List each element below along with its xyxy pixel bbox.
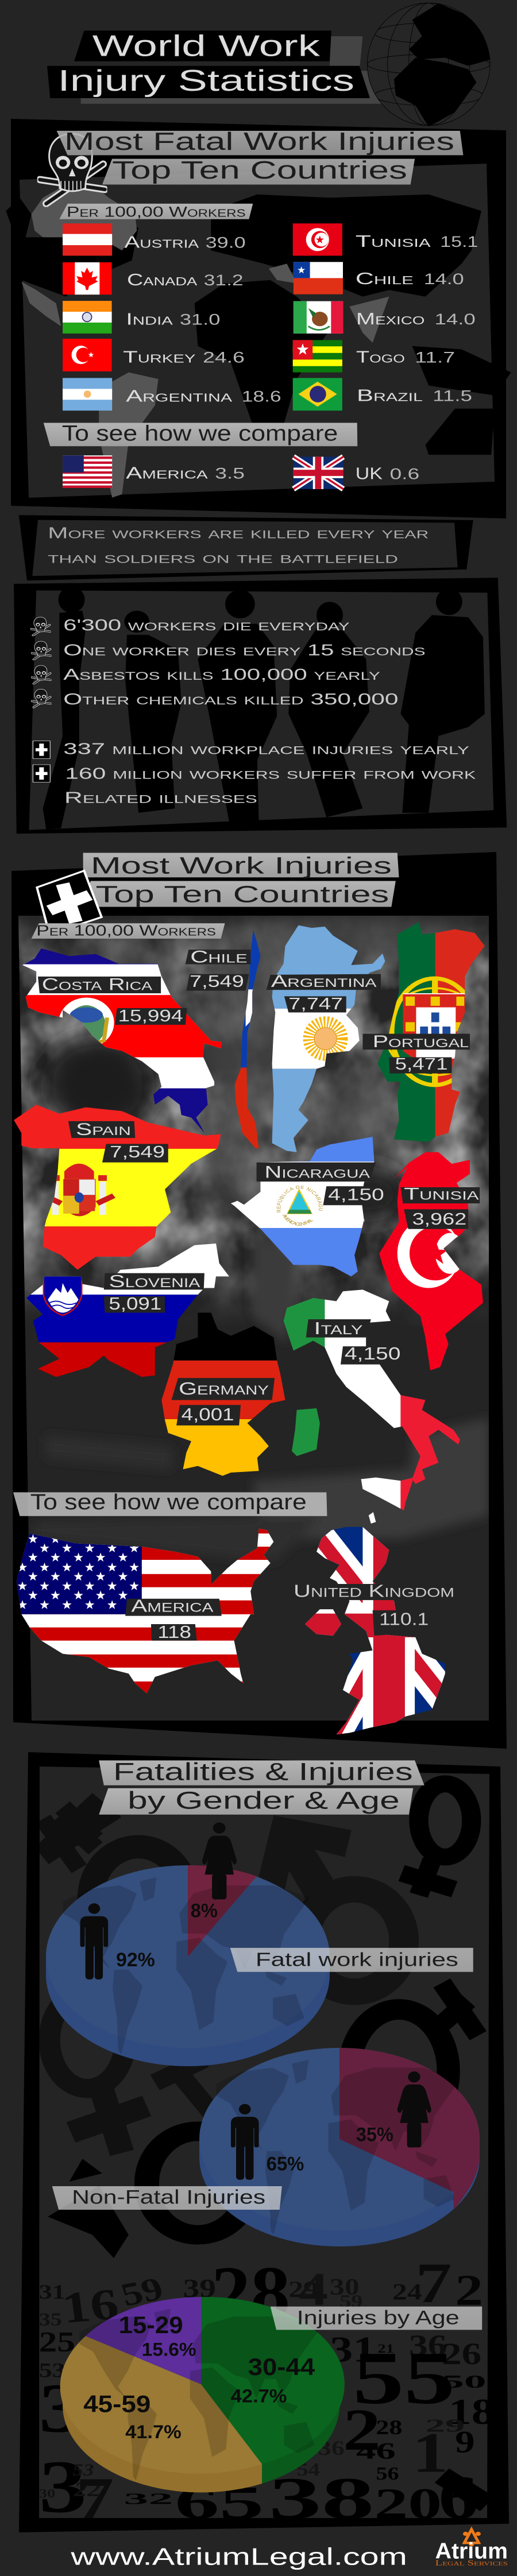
- numbers backdrop: 4: [298, 2264, 328, 2315]
- injury statistics: [63, 740, 476, 807]
- numbers backdrop: 35: [39, 2310, 62, 2330]
- panel: most work injuries: [11, 852, 507, 1749]
- heading line 2: [102, 157, 415, 184]
- numbers backdrop: 59: [339, 2291, 362, 2311]
- map: Argentina: [271, 924, 389, 1153]
- label: 92 percent: 92%: [116, 1949, 155, 1971]
- map: Nicaragua: AMERICA CENTRAL: [282, 1215, 314, 1226]
- heading line 2: by Gender & Age: [128, 1787, 400, 1814]
- country values: right column: Brazil: [357, 387, 423, 405]
- panel: soldiers callout and statistics: [14, 515, 507, 834]
- map: Costa Rica: [20, 946, 224, 1134]
- map: Tunisia: [376, 1149, 488, 1374]
- numbers backdrop: 31: [330, 2330, 376, 2370]
- subheading: per 100,00 workers: [59, 204, 253, 220]
- age labels: 15.6%: [142, 2339, 196, 2360]
- country values: left column: 39.0: [206, 234, 246, 251]
- labels: lower countries: Italy: [314, 1318, 363, 1338]
- numbers backdrop: 29: [425, 2415, 465, 2435]
- country values: right column: Mexico: [356, 310, 425, 328]
- country values: left column: India: [126, 310, 173, 328]
- numbers backdrop: 31: [39, 2280, 65, 2303]
- numbers backdrop: 50: [442, 2372, 487, 2392]
- label: 8 percent: 8%: [191, 1899, 218, 1922]
- numbers backdrop: 38: [269, 2465, 374, 2531]
- age labels: 45-59: [83, 2391, 151, 2418]
- numbers backdrop: 22: [74, 2478, 101, 2501]
- labels: upper countries: 4,150: [328, 1185, 384, 1203]
- labels: upper countries: Costa Rica: [42, 975, 152, 994]
- labels: upper countries: 7,549: [110, 1142, 165, 1161]
- labels: upper countries: Spain: [76, 1120, 131, 1139]
- subheading: per 100,00 workers: Per 100,00 Workers: [67, 204, 246, 220]
- icon: plus: [37, 871, 102, 934]
- heading line 1: Most Fatal Work Injuries: [64, 128, 454, 156]
- numbers backdrop: 55: [353, 2337, 455, 2420]
- banner: non-fatal injuries: Non-Fatal Injuries: [72, 2186, 265, 2208]
- numbers backdrop: 2: [343, 2396, 381, 2463]
- panel frame: [19, 1752, 509, 2532]
- panel: gender and age: [19, 1752, 509, 2532]
- x-ray backdrop: [18, 916, 489, 1562]
- labels: upper countries: 7,549: [190, 972, 244, 990]
- numbers backdrop: 9: [455, 2425, 475, 2459]
- label: Tunisia: [400, 1184, 480, 1229]
- comparison heading: To see how we compare: [62, 421, 338, 446]
- numbers backdrop: 30: [330, 2274, 360, 2300]
- labels: upper countries: Portugal: [373, 1032, 469, 1051]
- numbers backdrop: 2: [455, 2265, 483, 2314]
- flag: Togo: [293, 340, 342, 373]
- map: Spain: [10, 1102, 227, 1273]
- country values: left column: [123, 234, 281, 482]
- label: Tunisia: Tunisia: [404, 1184, 479, 1203]
- silhouettes of workers: [43, 587, 485, 829]
- age labels: 30-44: [248, 2354, 315, 2381]
- title line 2: [47, 64, 370, 98]
- labels: lower countries: [104, 1271, 455, 1642]
- panel: most fatal work injuries: [6, 119, 511, 518]
- numbers backdrop: 16: [59, 2279, 121, 2333]
- country values: left column: America: [126, 464, 209, 482]
- flag: America: [63, 455, 112, 488]
- country values: left column: Canada: [127, 271, 198, 289]
- map: Italy: [280, 1288, 463, 1516]
- labels: upper countries: Nicaragua: [264, 1163, 370, 1182]
- labels: upper countries: 7,747: [288, 994, 343, 1013]
- numbers backdrop: 46: [356, 2439, 396, 2464]
- country values: right column: 0.6: [389, 466, 419, 483]
- chart: fatal work injuries pie: [46, 1865, 330, 2066]
- flag: Brazil: [293, 378, 342, 410]
- subheading: per 100,00 workers: Per 100,00 Workers: [36, 923, 216, 939]
- flag: Chile: [294, 262, 343, 295]
- icon: man non-fatal: [231, 2104, 259, 2180]
- map: Portugal: [376, 920, 488, 1143]
- age labels: 42.7%: [231, 2385, 287, 2406]
- map: United Kingdom: [303, 1512, 452, 1740]
- heading line 2: Top Ten Countries: [95, 881, 389, 908]
- numbers backdrop: 20: [374, 2479, 442, 2528]
- labels: upper countries: 15,994: [118, 1006, 183, 1025]
- icon: woman non-fatal: [398, 2071, 431, 2148]
- numbers backdrop: 39: [183, 2275, 216, 2303]
- country values: right column: Tunisia: [356, 233, 431, 251]
- labels: upper countries: Argentina: [271, 972, 377, 991]
- icon: skull and crossbones: [40, 134, 105, 204]
- labels: lower countries: 110.1: [379, 1609, 429, 1629]
- title line 2: Injury Statistics: [57, 64, 354, 97]
- icons: skulls: [31, 617, 51, 707]
- injury statistics: 160 million workers suffer from work: [65, 765, 476, 783]
- label: 65 percent: 65%: [267, 2153, 304, 2175]
- title line 1: [74, 29, 331, 63]
- website address: www.AtriumLegal.com: [70, 2544, 407, 2570]
- icon: Atrium logo mark: [463, 2529, 481, 2546]
- country values: left column: 3.5: [215, 464, 245, 482]
- deaths statistics: [63, 617, 425, 708]
- title line 1: World Work: [92, 29, 320, 63]
- heading line 2: Top Ten Countries: [112, 157, 407, 184]
- numbers backdrop: 53: [39, 2358, 65, 2382]
- age labels: [83, 2312, 315, 2442]
- country values: left column: 31.0: [180, 311, 220, 328]
- map: America: [13, 1527, 277, 1696]
- numbers backdrop: 24: [392, 2280, 422, 2305]
- numbers backdrop: 28: [211, 2252, 290, 2334]
- numbers backdrop: 54: [297, 2459, 320, 2480]
- deaths statistics: Asbestos kills 100,000 yearly: [63, 666, 380, 684]
- numbers backdrop: 3: [39, 2446, 87, 2528]
- banner: fatal work injuries: Fatal work injuries: [256, 1949, 458, 1970]
- labels: upper countries: Chile: [190, 947, 248, 966]
- flag: Turkey: [63, 339, 112, 371]
- country values: right column: Togo: [356, 348, 405, 366]
- injury statistics: 337 million workplace injuries yearly: [63, 740, 469, 758]
- labels: upper countries: [38, 947, 470, 1205]
- title block: [47, 3, 491, 127]
- flag: Austria: [63, 223, 112, 255]
- chart: non-fatal injuries pie: [199, 2048, 480, 2246]
- map: Slovenia: [23, 1242, 234, 1378]
- country values: right column: 14.0: [424, 270, 464, 288]
- callout: workers vs soldiers: [19, 515, 473, 580]
- labels: lower countries: 4,001: [182, 1404, 234, 1424]
- heading line 1: Most Work Injuries: [91, 853, 392, 879]
- country values: right column: 11.5: [433, 388, 472, 405]
- flag: India: [63, 301, 112, 334]
- country values: left column: Austria: [124, 234, 199, 252]
- country values: right column: [356, 233, 478, 483]
- numbers backdrop: 3: [39, 2370, 83, 2447]
- numbers backdrop: 18: [449, 2392, 495, 2432]
- labels: lower countries: 5,091: [109, 1293, 161, 1314]
- panel frame: [11, 852, 507, 1749]
- deaths statistics: 6'300 workers die everyday: [63, 617, 350, 634]
- numbers backdrop: 53: [72, 2461, 94, 2480]
- labels: lower countries: America: [131, 1596, 214, 1616]
- numbers backdrop: [40, 2264, 487, 2518]
- numbers backdrop: 29: [288, 2277, 318, 2303]
- flag: Mexico: [294, 301, 344, 334]
- deaths statistics: One worker dies every 15 seconds: [63, 641, 425, 659]
- heading line 1: [57, 128, 463, 156]
- country values: left column: 31.2: [204, 272, 244, 289]
- labels: lower countries: United Kingdom: [294, 1581, 454, 1601]
- comparison heading: To see how we compare: [30, 1490, 307, 1514]
- country values: right column: Chile: [356, 270, 414, 288]
- logo subtitle: Legal Services: [435, 2559, 508, 2567]
- flag: Canada: [63, 262, 112, 295]
- numbers backdrop: 26: [442, 2337, 481, 2371]
- labels: lower countries: Slovenia: [109, 1271, 200, 1291]
- icon: woman fatal: [202, 1822, 237, 1900]
- flag: Tunisia: [293, 223, 342, 255]
- country values: left column: 24.6: [203, 348, 245, 366]
- panel frame: [14, 578, 507, 834]
- country values: left column: 18.6: [242, 388, 281, 405]
- country values: left column: Argentina: [126, 388, 233, 406]
- labels: upper countries: 5,471: [395, 1055, 447, 1073]
- numbers backdrop: 65: [175, 2477, 264, 2529]
- deaths statistics: Other chemicals killed 350,000: [63, 691, 398, 708]
- country values: right column: 11.7: [415, 348, 455, 366]
- heading line 1: Fatalities & Injuries: [113, 1758, 413, 1785]
- chart: injuries by age pie: [60, 2297, 345, 2492]
- country values: right column: UK: [356, 465, 383, 483]
- numbers backdrop: 56: [376, 2463, 399, 2484]
- banner: injuries by age: Injuries by Age: [297, 2307, 460, 2329]
- numbers backdrop: 7: [76, 2465, 114, 2531]
- icon: man fatal: [80, 1903, 108, 1980]
- banner: fatal work injuries: [230, 1948, 473, 1972]
- numbers backdrop: 59: [117, 2271, 167, 2313]
- injury statistics: Related illnesses: [64, 789, 257, 807]
- flag: UK: [294, 457, 344, 489]
- map: Nicaragua: [231, 1137, 375, 1277]
- icons: plus signs: [33, 741, 50, 783]
- country values: right column: 15.1: [440, 233, 478, 250]
- callout: workers vs soldiers: than soldiers on the battlefield: [48, 549, 398, 567]
- label: 35 percent: 35%: [356, 2124, 393, 2145]
- labels: lower countries: Germany: [179, 1378, 269, 1399]
- map: Chile: [234, 930, 261, 1148]
- flag: Argentina: [63, 378, 112, 410]
- map: Nicaragua: REPÚBLICA DE NICARAGUA: [277, 1186, 323, 1213]
- numbers backdrop: 36: [318, 2436, 345, 2459]
- numbers backdrop: 25: [39, 2326, 75, 2358]
- grey title accents: [81, 36, 400, 104]
- heading line 2: [99, 1787, 413, 1815]
- numbers backdrop: 32: [124, 2490, 173, 2508]
- world map backdrop: [6, 184, 511, 498]
- numbers backdrop: 28: [376, 2416, 402, 2439]
- numbers backdrop: 36: [409, 2329, 447, 2362]
- age labels: 41.7%: [125, 2421, 182, 2442]
- callout: workers vs soldiers: More workers are killed every year: [48, 524, 429, 542]
- gender symbols backdrop: [39, 1784, 495, 2532]
- country values: left column: Turkey: [123, 348, 195, 366]
- numbers backdrop: 1: [412, 2421, 449, 2484]
- country values: right column: 14.0: [435, 311, 476, 328]
- labels: lower countries: 118: [157, 1622, 191, 1642]
- footer: [70, 2529, 508, 2570]
- map: Germany: [159, 1311, 290, 1478]
- numbers backdrop: 6: [438, 2463, 478, 2532]
- age labels: 15-29: [119, 2312, 183, 2339]
- globe: [367, 3, 491, 127]
- panel frame: [11, 119, 506, 518]
- label: Tunisia: 3,962: [412, 1210, 466, 1228]
- numbers backdrop: 30: [39, 2486, 55, 2501]
- numbers backdrop: 7: [415, 2252, 452, 2315]
- numbers backdrop: 21: [377, 2341, 394, 2356]
- labels: lower countries: 4,150: [345, 1343, 400, 1363]
